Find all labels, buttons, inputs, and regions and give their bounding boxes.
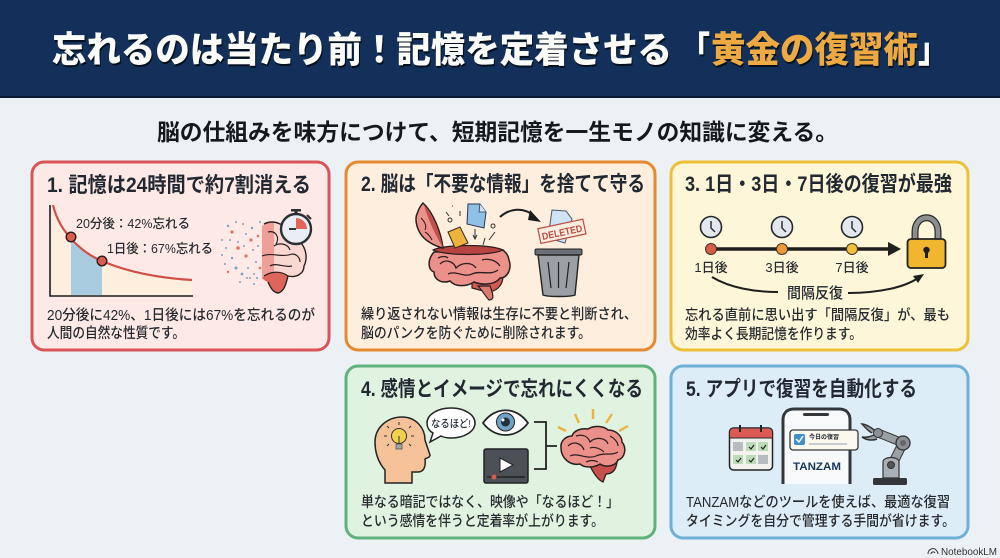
panel 2: brain discards unneeded info (346, 162, 655, 350)
panel 4: emotion and imagery (346, 366, 655, 538)
forgetting curve chart (50, 205, 213, 296)
icon: padlock (908, 218, 946, 268)
description 5: タイミングを自分で管理する手間が省けます。 (686, 512, 955, 530)
panel 3: spaced repetition schedule (671, 162, 968, 350)
icon: video player (484, 449, 528, 483)
icon: opened brain with files (416, 203, 510, 300)
description 5: TANZAMなどのツールを使えば、最適な復習 (686, 493, 950, 511)
title: 」 (918, 29, 948, 70)
timeline with clocks (694, 216, 901, 275)
heading 1: 1. 記憶は24時間で約7割消える (47, 174, 311, 197)
icon: calendar (730, 425, 772, 470)
icon: active brain (558, 409, 628, 482)
timeline with clocks: 1日後 (694, 260, 728, 275)
description 4: という感情を伴うと定着率が上がります。 (361, 512, 604, 530)
forgetting curve chart: 20分後：42%忘れる (76, 216, 190, 231)
description 2: 繰り返されない情報は生存に不要と判断され、 (361, 306, 637, 323)
heading 2: 2. 脳は「不要な情報」を捨てて守る (361, 173, 645, 196)
timeline with clocks: 7日後 (835, 260, 869, 275)
speech bubble (427, 408, 475, 442)
timeline with clocks: 3日後 (765, 260, 799, 275)
arrow to trash (500, 210, 541, 222)
icon: head with light bulb (375, 417, 430, 483)
bracket connector (534, 422, 557, 469)
icon: trash can with deleted stamp (535, 210, 586, 296)
icon: trash can with deleted stamp: DELETED (541, 224, 583, 243)
heading 4: 4. 感情とイメージで忘れにくくなる (361, 377, 643, 401)
icon: eye (483, 410, 528, 435)
speech bubble: なるほど! (431, 418, 471, 430)
description 1: 人間の自然な性質です。 (47, 324, 185, 342)
title: 黄金の復習術 (711, 29, 918, 70)
heading 5: 5. アプリで復習を自動化する (686, 378, 917, 401)
heading 3: 3. 1日・3日・7日後の復習が最強 (685, 172, 952, 196)
icon: phone with TANZAM app: TANZAM (793, 461, 841, 473)
spaced repetition arrow label (712, 274, 924, 302)
description 4 (361, 494, 619, 530)
description 1 (47, 306, 315, 342)
description 3: 忘れる直前に思い出す「間隔反復」が、最も (685, 306, 950, 324)
title: 忘れるのは当たり前！記憶を定着させる (52, 29, 672, 70)
description 2: 脳のパンクを防ぐために削除されます。 (361, 325, 591, 342)
description 3 (685, 306, 950, 343)
icon: robot arm (862, 424, 910, 485)
panel 5: automate with apps (671, 366, 968, 538)
panel 1: memory fades in 24 hours (32, 162, 329, 350)
title: 「 (680, 29, 710, 70)
header band (0, 0, 1000, 98)
description 3: 効率よく長期記憶を作ります。 (685, 326, 862, 343)
subtitle: 脳の仕組みを味方につけて、短期記憶を一生モノの知識に変える。 (157, 119, 838, 145)
NotebookLM credit: NotebookLM (941, 546, 997, 558)
icon: phone with TANZAM app (783, 409, 858, 484)
icon: fading brain with stopwatch (221, 209, 311, 293)
description 1: 20分後に42%、1日後には67%を忘れるのが (47, 306, 315, 324)
description 4: 単なる暗記ではなく、映像や「なるほど！」 (361, 494, 619, 511)
description 5 (686, 493, 955, 530)
description 2 (361, 306, 637, 342)
spaced repetition arrow label: 間隔反復 (787, 285, 843, 302)
forgetting curve chart: 1日後：67%忘れる (107, 241, 213, 256)
icon: phone with TANZAM app: 今日の復習 (809, 433, 839, 441)
